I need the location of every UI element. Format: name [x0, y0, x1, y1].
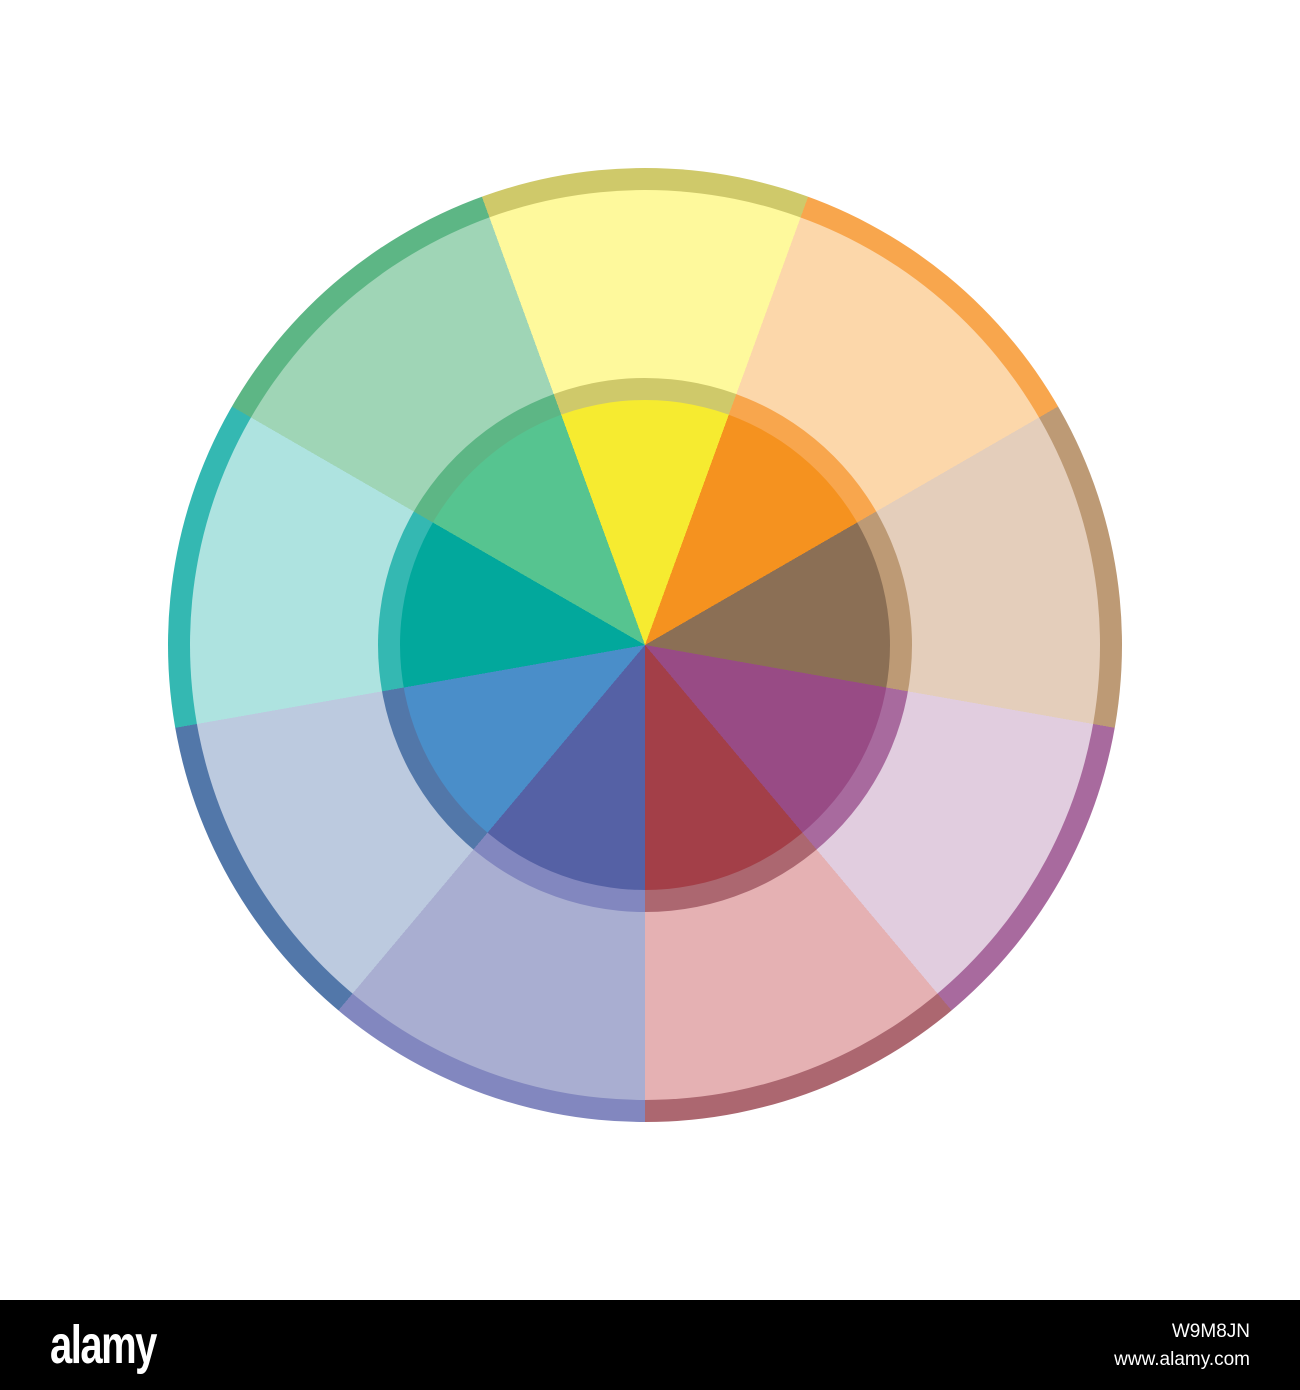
footer logo text: alamy [50, 1315, 156, 1375]
outer ring: darker rim [168, 168, 1122, 1122]
color wheel [168, 168, 1122, 1122]
footer image id: www.alamy.com [1114, 1349, 1250, 1370]
inner ring [378, 378, 912, 912]
footer image id [1114, 1321, 1250, 1370]
footer bar [0, 1300, 1300, 1390]
outer segments: light tints [190, 190, 1100, 1100]
footer image id: W9M8JN [1172, 1321, 1250, 1342]
inner segments: saturated colors [400, 400, 890, 890]
